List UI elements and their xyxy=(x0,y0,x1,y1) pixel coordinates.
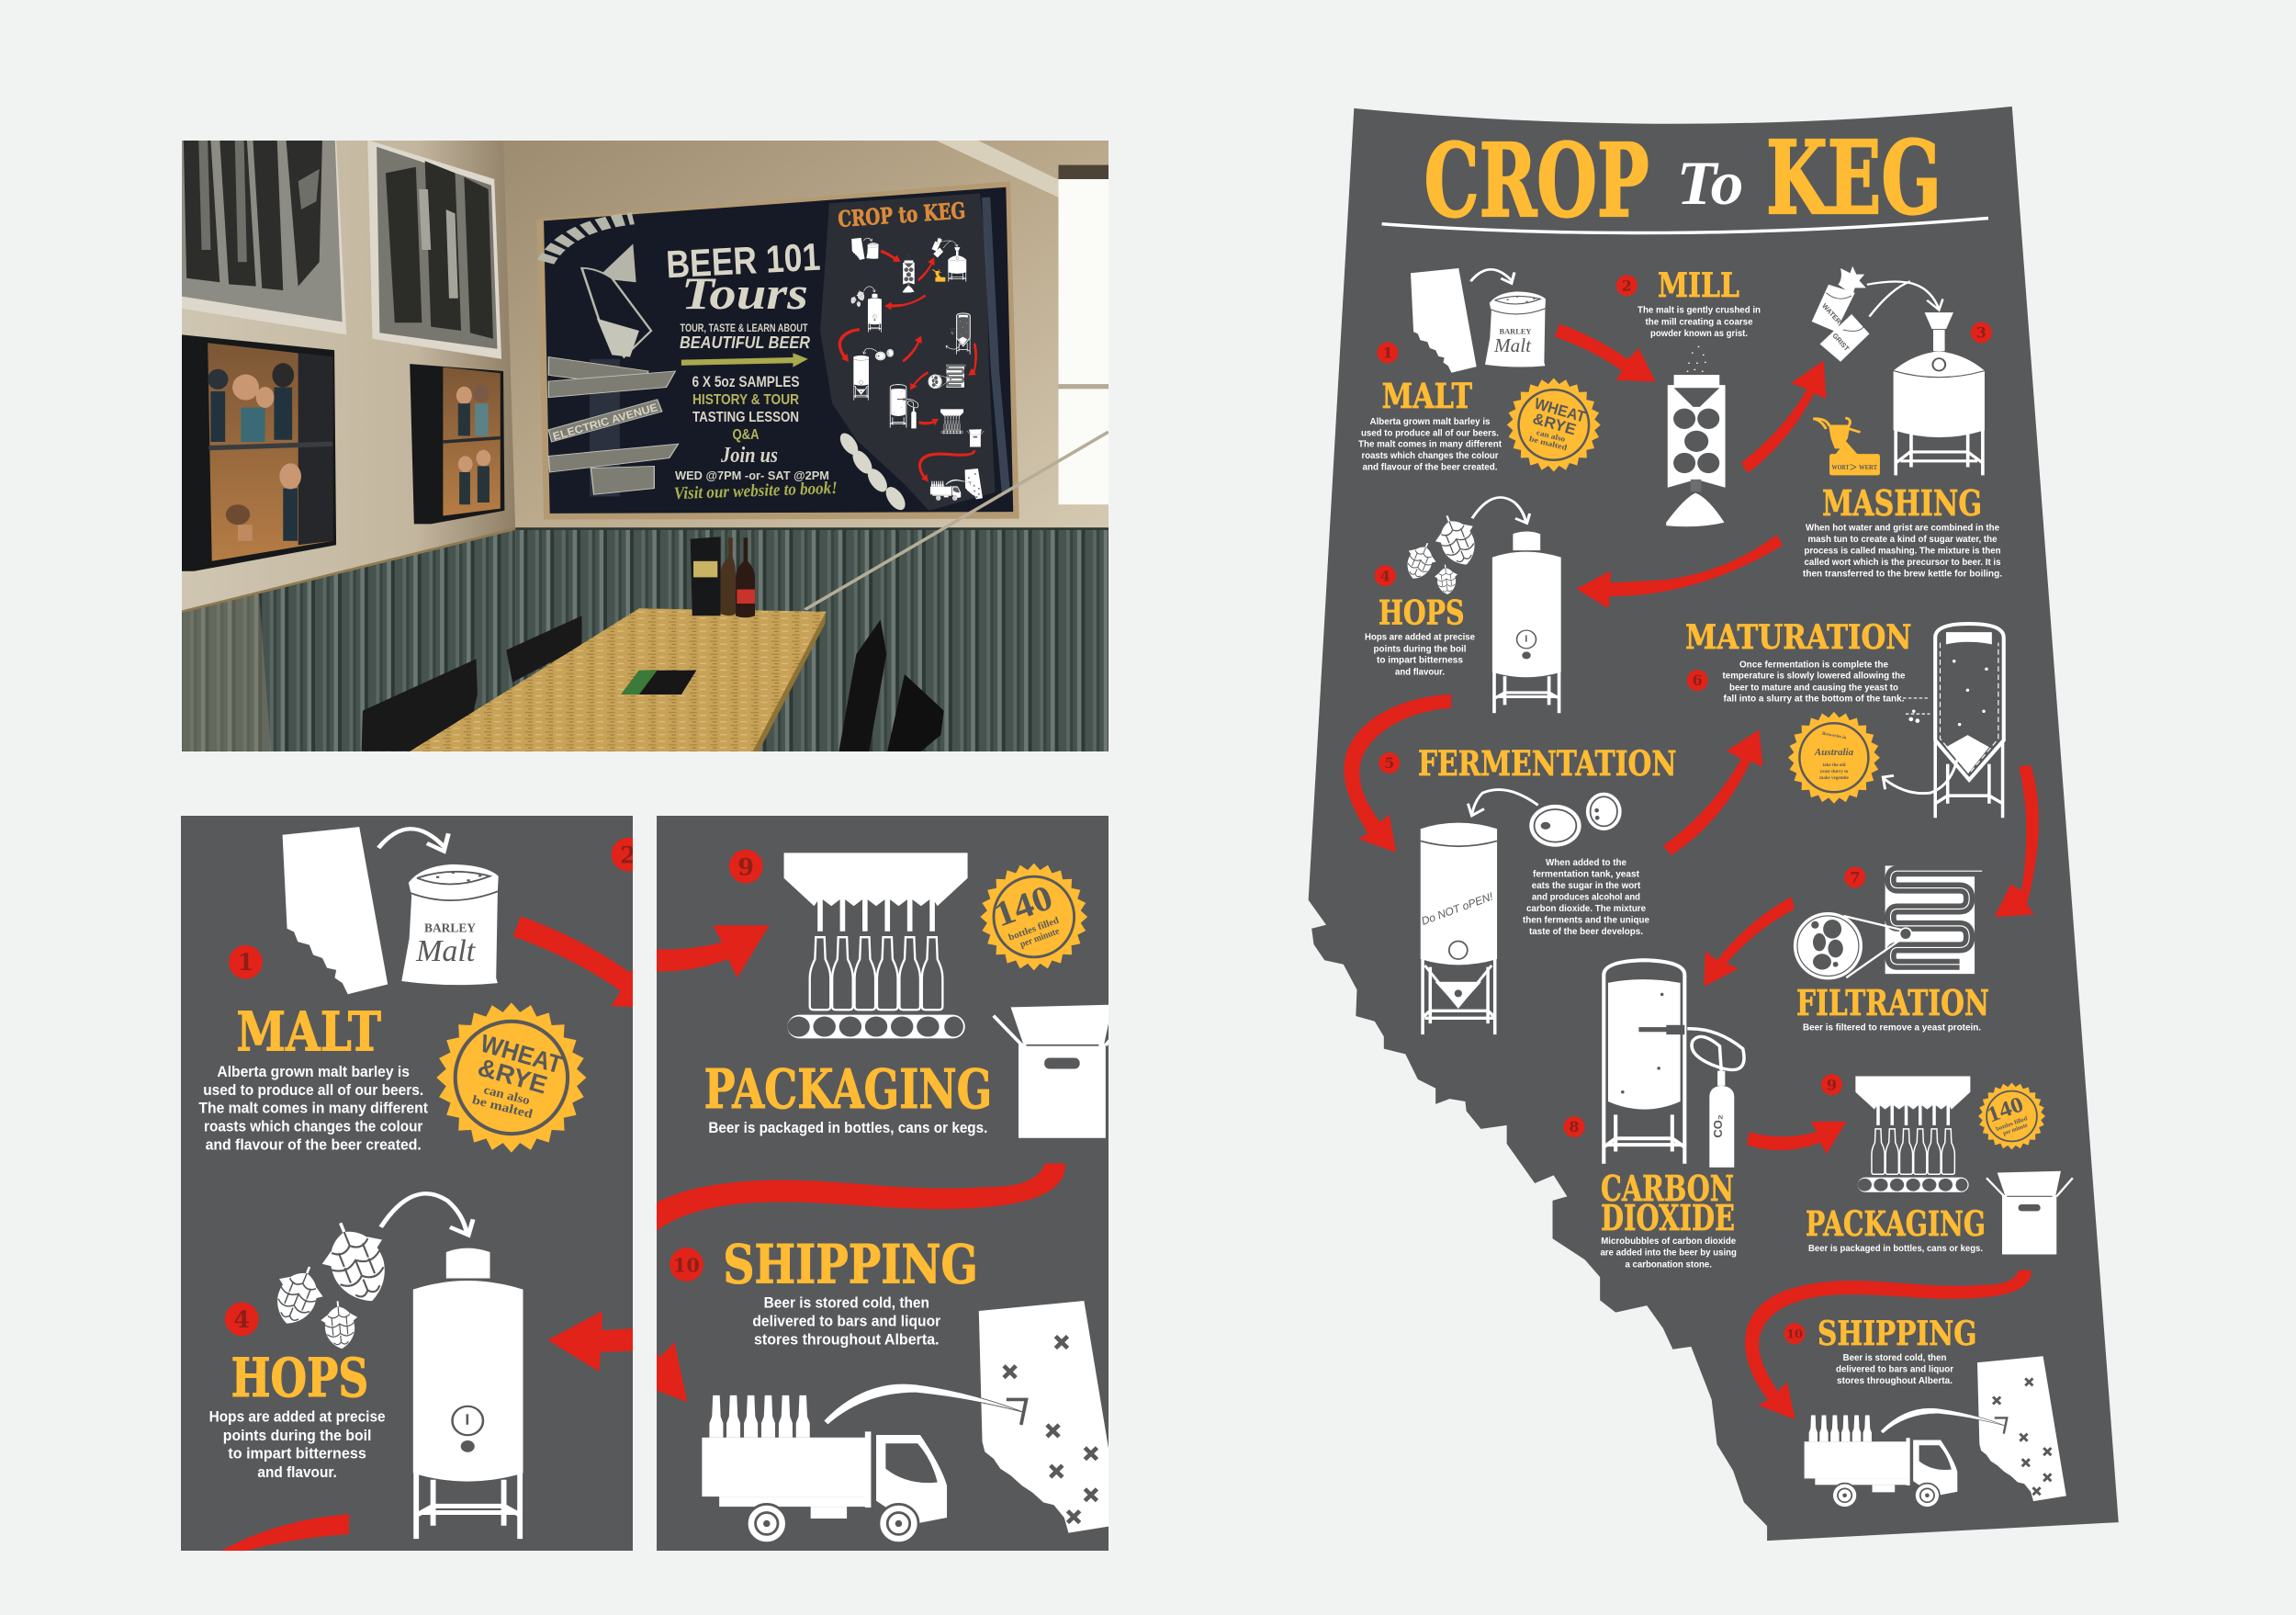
step number 10 xyxy=(670,1248,703,1282)
step number 7: 7 xyxy=(1850,869,1860,886)
icon: Alberta xyxy=(283,827,388,994)
text: hops description: to impart bitterness xyxy=(1377,654,1463,665)
icon: barley malt sack: Malt xyxy=(415,934,476,968)
icon: barley malt sack xyxy=(1485,291,1546,367)
icon: mill xyxy=(1666,346,1726,526)
arrow: Alberta to sack xyxy=(378,829,448,852)
text: hops description: points during the boil xyxy=(223,1427,371,1444)
icon: barley malt sack: BARLEY xyxy=(424,921,476,935)
text: hops description: Hops are added at precise xyxy=(1365,632,1475,643)
arrow: carbonation to packaging xyxy=(657,925,770,977)
goat sign lettering: > xyxy=(1850,461,1857,475)
text: fermentation description xyxy=(1523,857,1649,937)
text: carbon dioxide description xyxy=(1600,1236,1737,1270)
text: hops description xyxy=(1365,632,1475,678)
step number 8: 8 xyxy=(1569,1118,1580,1135)
icon: goat sign xyxy=(1813,418,1880,475)
text: maturation description: beer to mature and causing the yeast to xyxy=(1729,682,1898,693)
photo: brewery tasting room with Beer 101 chalkboard xyxy=(174,129,1120,762)
badge: Australia vegemite fact: take the old xyxy=(1822,763,1846,768)
text: fermentation description: eats the sugar in the wort xyxy=(1532,880,1641,891)
text: malt description: and flavour of the beer created. xyxy=(1363,462,1498,473)
text: mill description: The malt is gently crushed in xyxy=(1638,305,1761,316)
chalkboard lettering: Visit our website to book! xyxy=(673,479,838,503)
step number 2 xyxy=(1616,275,1638,296)
text: shipping description: Beer is stored cold, then xyxy=(1843,1352,1946,1363)
arrow: buckets to mash tun xyxy=(1867,281,1942,317)
badge: Australia vegemite fact: Australia xyxy=(1814,747,1854,758)
step number 4 xyxy=(1375,565,1396,586)
badge: wheat and rye: WHEAT xyxy=(478,1029,566,1079)
title xyxy=(1424,119,1941,240)
text: hops description xyxy=(209,1407,386,1481)
icon: delivery truck xyxy=(702,1395,947,1543)
badge: wheat and rye: be malted xyxy=(1528,434,1569,452)
arrow: malt to mill xyxy=(512,916,633,1007)
chalkboard lettering: TASTING LESSON xyxy=(692,410,799,425)
icon: bottling line xyxy=(784,853,968,1038)
arrow: hops to kettle xyxy=(381,1193,473,1235)
arrow: mill to mashing xyxy=(1741,360,1826,473)
text: shipping description xyxy=(1836,1352,1953,1386)
arrow: mash to kettle xyxy=(1576,535,1783,608)
icon: brew kettle xyxy=(1492,532,1561,713)
badge: 140 bottles per minute xyxy=(1978,1082,2045,1150)
chalkboard lettering: BEAUTIFUL BEER xyxy=(680,333,810,352)
arrow: truck to map xyxy=(824,1383,1026,1425)
arrow: maturation to filtration xyxy=(1995,765,2039,917)
title: KEG xyxy=(1766,119,1941,237)
badge: 140 bottles per minute: bottles filled xyxy=(1007,916,1061,943)
text: mashing description: process is called mashing. The mixture is then xyxy=(1804,546,2000,557)
step number 5: 5 xyxy=(1384,754,1394,772)
chalkboard lettering: BEER 101 xyxy=(665,235,821,286)
badge: wheat and rye xyxy=(1507,378,1601,472)
text: malt description: roasts which changes the colour xyxy=(204,1117,423,1135)
arrow: fermentation to maturation xyxy=(1663,729,1762,855)
step number 9: 9 xyxy=(1827,1077,1837,1093)
step number 3: 3 xyxy=(1976,323,1986,342)
text: malt description: and flavour of the beer created. xyxy=(206,1136,422,1154)
text: fermentation description: taste of the beer develops. xyxy=(1529,926,1643,937)
arrow: tank to yeast badge xyxy=(1883,748,1960,794)
panel: detail crop malt and hops xyxy=(181,816,633,1551)
text: hops description: to impart bitterness xyxy=(228,1444,366,1462)
heading: carbon dioxide: DIOXIDE xyxy=(1601,1197,1735,1238)
icon: Alberta delivery map xyxy=(1977,1356,2066,1501)
heading: filtration: FILTRATION xyxy=(1796,982,1989,1023)
badge: 140 bottles per minute: bottles filled xyxy=(1995,1115,2029,1133)
text: mashing description: then transferred to the brew kettle for boiling. xyxy=(1803,568,2002,579)
icon: barley malt sack xyxy=(401,864,499,985)
badge: wheat and rye: &RYE xyxy=(1531,410,1578,438)
badge: Australia vegemite fact: Breweries in xyxy=(1821,732,1847,740)
badge: 140 bottles per minute: per minute xyxy=(1019,926,1061,950)
icon: fermentation tank xyxy=(1421,823,1497,1034)
icon: brew kettle xyxy=(413,1248,523,1539)
title: To xyxy=(1677,148,1743,218)
text: mashing description xyxy=(1803,522,2002,579)
step number 10 xyxy=(1784,1323,1806,1344)
tank text: Do not open: Do NOT oPEN! xyxy=(1420,889,1495,928)
sack lettering xyxy=(1493,327,1532,356)
badge: wheat and rye xyxy=(436,1002,586,1153)
icon: yeast cells xyxy=(1529,793,1622,847)
text: hops description: Hops are added at precise xyxy=(209,1407,386,1425)
arrow: kettle to fermentation xyxy=(1344,695,1451,853)
step number 9 xyxy=(1821,1074,1842,1095)
text: malt description: used to produce all of our beers. xyxy=(1361,428,1499,439)
text: maturation description: Once fermentation is complete the xyxy=(1739,660,1888,671)
goat sign lettering: WERT xyxy=(1859,464,1877,471)
step number 1: 1 xyxy=(1382,344,1392,362)
text: shipping description xyxy=(752,1294,941,1349)
heading: shipping: SHIPPING xyxy=(723,1233,978,1295)
heading: packaging: PACKAGING xyxy=(704,1056,992,1121)
chalkboard lettering: Tours xyxy=(681,267,808,319)
icon: Alberta xyxy=(1411,268,1477,373)
panel: detail crop packaging and shipping xyxy=(657,816,1109,1551)
heading: mill: MILL xyxy=(1658,266,1739,305)
heading: packaging: PACKAGING xyxy=(1806,1203,1986,1244)
step number 9: 9 xyxy=(737,853,754,881)
text: hops description: points during the boil xyxy=(1374,643,1467,654)
chalkboard lettering: 6 X 5oz SAMPLES xyxy=(692,373,799,390)
heading: maturation: MATURATION xyxy=(1685,618,1912,657)
sack lettering: Malt xyxy=(1493,334,1532,356)
text: malt description: The malt comes in many different xyxy=(198,1100,428,1117)
badge: Australia vegemite fact: make vegemite xyxy=(1819,776,1850,781)
heading: malt: MALT xyxy=(236,999,381,1063)
goat sign lettering xyxy=(1831,461,1877,475)
heading: malt: MALT xyxy=(1382,376,1472,416)
step number 10: 10 xyxy=(1786,1328,1803,1341)
step number 2: 2 xyxy=(620,841,636,869)
text: fermentation description: When added to the xyxy=(1546,857,1626,868)
badge: 140 bottles per minute: 140 xyxy=(989,878,1058,934)
icon: maturation tank xyxy=(1903,624,2004,818)
arrow: packaging to shipping xyxy=(657,1163,1065,1402)
icon: filter xyxy=(1794,865,1982,979)
heading: shipping: SHIPPING xyxy=(1818,1315,1976,1353)
chalkboard lettering: Join us xyxy=(720,444,778,468)
bucket lettering xyxy=(1820,301,1851,353)
badge: wheat and rye: &RYE xyxy=(475,1053,550,1100)
text: filtration description: Beer is filtered to remove a yeast protein. xyxy=(1803,1022,1981,1033)
icon: Alberta delivery map xyxy=(979,1301,1121,1533)
text: fermentation description: carbon dioxide. The mixture xyxy=(1526,903,1646,914)
icon: mash tun xyxy=(1894,312,1985,475)
text: shipping description: delivered to bars and liquor xyxy=(1836,1363,1953,1374)
heading: mashing: MASHING xyxy=(1822,482,1982,524)
step number 10: 10 xyxy=(673,1253,700,1276)
bucket lettering: GRIST xyxy=(1830,332,1851,353)
badge: Australia vegemite fact xyxy=(1788,712,1880,804)
badge: wheat and rye: WHEAT xyxy=(1533,395,1588,426)
chalkboard lettering xyxy=(551,197,966,503)
text: malt description xyxy=(1358,416,1502,473)
panel: Alberta-shaped Crop to Keg poster xyxy=(1309,107,2119,1541)
text: fermentation description: then ferments and the unique xyxy=(1523,915,1649,926)
goat sign lettering: WORT xyxy=(1831,464,1850,471)
arrow: kettle to fermentation xyxy=(221,1514,349,1551)
step number 4 xyxy=(225,1302,259,1336)
chalkboard lettering: Q&A xyxy=(733,427,760,443)
step number 1 xyxy=(229,945,263,979)
step number 1 xyxy=(1377,342,1398,363)
title: CROP xyxy=(1424,121,1649,240)
icon: open box xyxy=(1986,1171,2073,1254)
heading: carbon dioxide: CARBON xyxy=(1601,1168,1734,1209)
arrow: Alberta to sack xyxy=(1470,269,1514,283)
text: packaging description: Beer is packaged in bottles, cans or kegs. xyxy=(1808,1243,1983,1254)
step number 3 xyxy=(1971,322,1992,344)
text: maturation description: temperature is slowly lowered allowing the xyxy=(1723,671,1906,682)
chalkboard lettering: HISTORY & TOUR xyxy=(692,392,799,408)
text: hops description: and flavour. xyxy=(1395,667,1445,678)
badge: wheat and rye: can also xyxy=(482,1082,532,1107)
icon: hops xyxy=(277,1222,385,1349)
arrow: packaging to shipping xyxy=(1745,1271,2032,1419)
map outline of Alberta xyxy=(1309,107,2119,1541)
text: malt description: Alberta grown malt barley is xyxy=(1370,416,1491,427)
text: fermentation description: fermentation tank, yeast xyxy=(1533,869,1639,880)
text: shipping description: stores throughout Alberta. xyxy=(754,1331,940,1349)
text: malt description: roasts which changes the colour xyxy=(1361,450,1499,461)
step number 1: 1 xyxy=(238,949,253,977)
arrow: hops to kettle xyxy=(1472,497,1530,524)
arrow: yeast to tank xyxy=(1468,790,1538,816)
text: mill description xyxy=(1638,305,1761,339)
arrow: truck to map xyxy=(1880,1408,2007,1434)
badge: Australia vegemite fact: yeast slurry to xyxy=(1820,770,1849,774)
icon: delivery truck xyxy=(1805,1416,1957,1508)
step number 2 xyxy=(612,838,633,871)
chalkboard lettering: TOUR, TASTE & LEARN ABOUT xyxy=(680,322,808,334)
text: malt description xyxy=(198,1063,428,1154)
badge: 140 bottles per minute: per minute xyxy=(2002,1122,2029,1137)
bucket lettering: WATER xyxy=(1820,301,1843,326)
step number 4: 4 xyxy=(1380,568,1390,584)
text: mashing description: mash tun to create a kind of sugar water, the xyxy=(1807,534,1998,545)
text: carbon dioxide description: are added into the beer by using xyxy=(1600,1248,1737,1259)
text: shipping description: stores throughout Alberta. xyxy=(1837,1375,1953,1386)
text: maturation description xyxy=(1723,660,1906,704)
text: carbon dioxide description: a carbonation stone. xyxy=(1625,1259,1712,1270)
text: mashing description: When hot water and grist are combined in the xyxy=(1806,522,1999,533)
text: mill description: powder known as grist. xyxy=(1650,328,1748,339)
chalkboard lettering: CROP to KEG xyxy=(837,197,966,232)
arrow: filtration to carbonation xyxy=(1704,897,1795,987)
sack lettering: BARLEY xyxy=(1499,327,1532,336)
step number 6 xyxy=(1687,670,1708,691)
text: maturation description: fall into a slurry at the bottom of the tank. xyxy=(1723,693,1905,704)
text: fermentation description: and produces alcohol and xyxy=(1532,891,1640,902)
CO2 label: CO₂ xyxy=(1711,1114,1725,1138)
text: malt description: used to produce all of our beers. xyxy=(203,1081,423,1099)
badge: wheat and rye: be malted xyxy=(471,1092,535,1121)
arrow: mash to kettle xyxy=(547,1311,633,1372)
icon: carbonation tank and CO2 cylinder xyxy=(1604,960,1744,1168)
text: mill description: the mill creating a coarse xyxy=(1646,316,1753,327)
heading: hops: HOPS xyxy=(231,1347,368,1409)
process icons and arrows xyxy=(1344,266,2073,1508)
mini poster inside chalkboard xyxy=(838,237,984,501)
text: mashing description: called wort which is the precursor to beer. It is xyxy=(1804,557,2001,568)
badge: wheat and rye: can also xyxy=(1536,427,1566,444)
chalkboard lettering: ELECTRIC AVENUE xyxy=(551,401,659,443)
text: carbon dioxide description: Microbubbles of carbon dioxide xyxy=(1601,1236,1736,1247)
arrow: carbonation to packaging xyxy=(1747,1122,1846,1154)
step number 4: 4 xyxy=(233,1306,250,1334)
step number 5 xyxy=(1379,752,1400,774)
step number 2: 2 xyxy=(1622,277,1632,294)
text: packaging description: Beer is packaged in bottles, cans or kegs. xyxy=(708,1119,987,1136)
icon: open box xyxy=(992,1005,1109,1138)
heading: hops: HOPS xyxy=(1379,593,1464,632)
icon: hops xyxy=(1400,508,1485,595)
text: malt description: Alberta grown malt barley is xyxy=(217,1063,410,1080)
heading: fermentation: FERMENTATION xyxy=(1418,743,1677,784)
step number 6: 6 xyxy=(1693,672,1703,689)
text: malt description: The malt comes in many different xyxy=(1358,439,1502,450)
icon: water and grist buckets xyxy=(1812,266,1869,362)
chalkboard lettering: WED @7PM -or- SAT @2PM xyxy=(675,469,829,482)
badge: 140 bottles per minute xyxy=(980,864,1087,970)
text: shipping description: Beer is stored cold, then xyxy=(764,1294,929,1312)
icon: bottling line xyxy=(1855,1076,1970,1192)
step number 7 xyxy=(1844,867,1865,887)
text: hops description: and flavour. xyxy=(257,1463,337,1481)
text: shipping description: delivered to bars and liquor xyxy=(752,1313,941,1330)
step number 8 xyxy=(1563,1116,1585,1137)
step number 9 xyxy=(729,850,763,884)
heading: carbon dioxide xyxy=(1601,1168,1735,1238)
arrow: malt to mill xyxy=(1555,324,1656,382)
badge: 140 bottles per minute: 140 xyxy=(1984,1092,2027,1127)
